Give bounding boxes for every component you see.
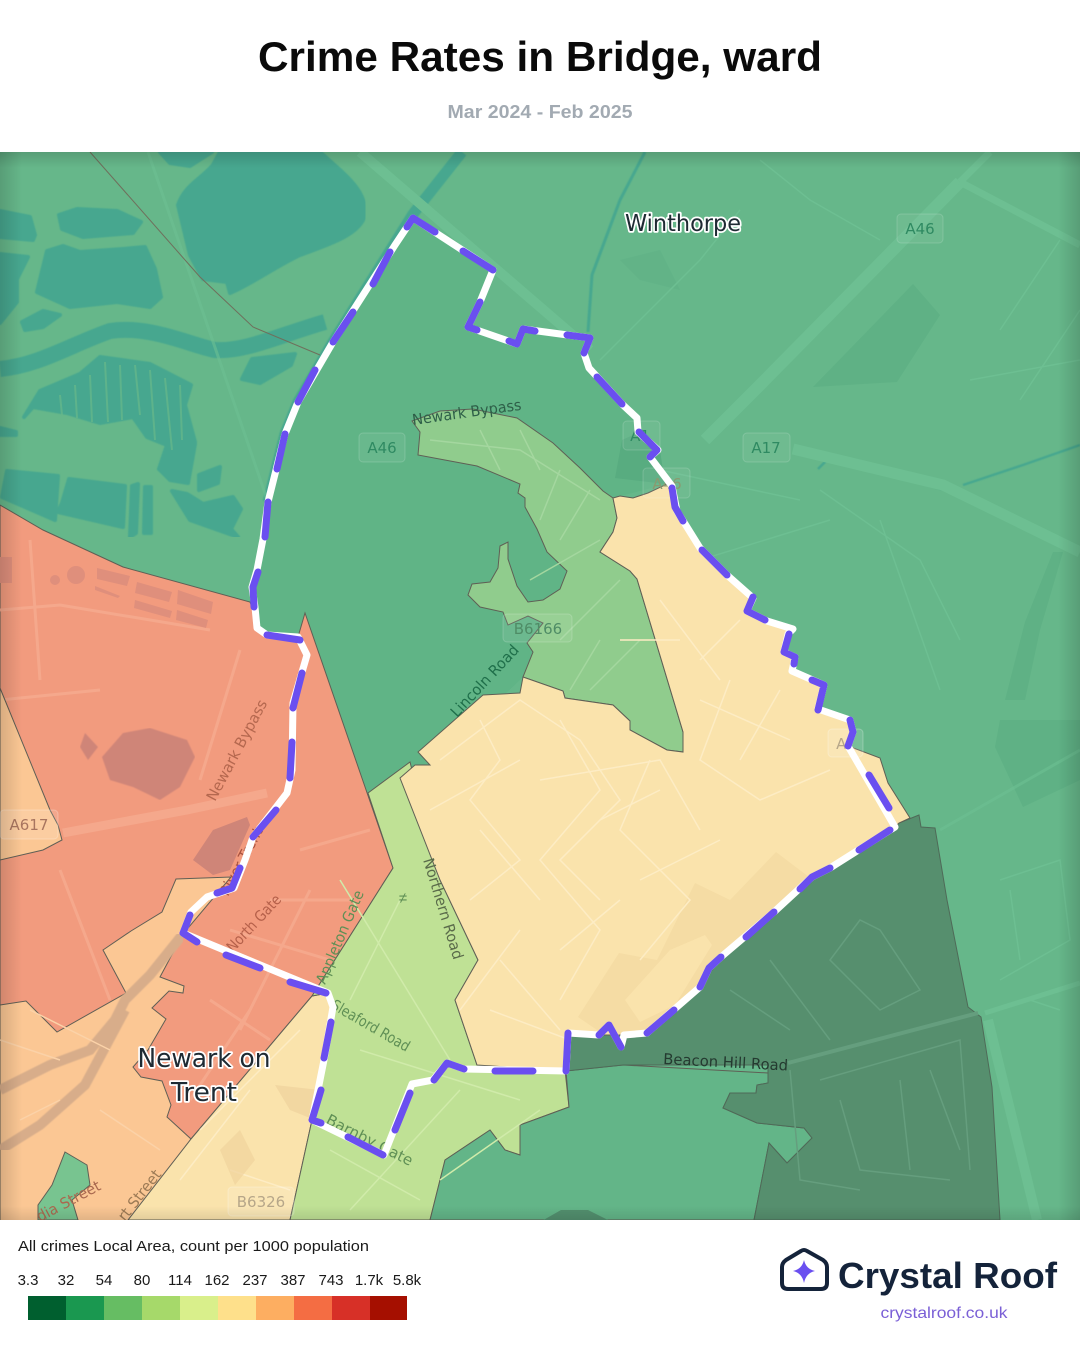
street network: [430, 600, 830, 1040]
road shield: B6166: [503, 614, 572, 642]
road shield: A46 north-east: [897, 214, 943, 243]
legend values: 54: [96, 1272, 112, 1289]
legend values: 1.7k: [355, 1272, 384, 1289]
legend values: 387: [280, 1272, 306, 1289]
ward region: green north: [270, 231, 585, 700]
region: cream central: [400, 484, 910, 1071]
place label: Winthorpe: Winthorpe: [625, 211, 741, 237]
streets in dark green: [730, 920, 978, 1190]
road label: Lincoln Road: Lincoln Road: [447, 641, 523, 721]
road shield: A617: [0, 810, 58, 839]
legend values: [18, 1272, 422, 1289]
road shield: A46 west: [359, 433, 405, 462]
region: peach west edge: [0, 688, 62, 860]
title: Crime Rates in Bridge, ward: [258, 33, 822, 80]
region: cream south-west: [128, 993, 333, 1220]
road label: Sleaford Road: Sleaford Road: [328, 996, 413, 1055]
road shield: A46 west: A46: [367, 439, 397, 457]
road labels: [33, 396, 789, 1226]
region: dark green south-east: [566, 815, 1000, 1220]
road shields: partly hidden A labels: A46: [652, 475, 682, 493]
water features: [0, 152, 365, 537]
subtitle: date range: Mar 2024 - Feb 2025: [448, 102, 632, 122]
salmon lake: [80, 728, 195, 800]
dark strip at base: [544, 1210, 608, 1220]
roundabout pond: [644, 453, 662, 482]
road shield: A17: [743, 433, 790, 462]
ward boundary: white base line: [183, 218, 895, 1155]
region: park patch: [38, 1152, 90, 1220]
region: high crime salmon: [0, 505, 393, 1139]
legend values: 162: [204, 1272, 230, 1289]
cream shaded land: [578, 852, 809, 1035]
road shield: A46 north-east: A46: [905, 220, 935, 238]
legend values: 32: [58, 1272, 74, 1289]
logo: [782, 1250, 1058, 1322]
road label: Sydney Street: dia Street: [33, 1177, 104, 1226]
region: lime south: [290, 762, 569, 1220]
road label: Barnby Gate: Barnby Gate: [323, 1111, 416, 1170]
region: peach town centre: [0, 877, 231, 1232]
legend: [18, 1238, 422, 1320]
logo wordmark: Crystal Roof: [838, 1255, 1058, 1296]
road label: Appleton Gate: Appleton Gate: [312, 887, 368, 987]
legend values: 80: [134, 1272, 150, 1289]
school patches: [220, 1085, 320, 1185]
road label: Newark Bypass west: Newark Bypass: [203, 696, 271, 804]
salmon works tanks: [0, 557, 213, 628]
legend values: 237: [242, 1272, 268, 1289]
road shield: A17: A17: [751, 439, 781, 457]
road label: Beacon Hill Road: Beacon Hill Road: [663, 1050, 789, 1075]
legend title: All crimes Local Area, count per 1000 population: [18, 1238, 369, 1255]
road label: Albert Street: rt Street: [114, 1166, 165, 1224]
streets in light green: [430, 430, 640, 690]
region: mid green south: [430, 1065, 812, 1220]
road shield: B6166: B6166: [514, 620, 562, 638]
road label: North Gate: North Gate: [223, 891, 285, 956]
reed bed stripes: [60, 362, 182, 450]
road shields: partly hidden A labels: A1: [630, 427, 650, 445]
road shield: A617: A617: [10, 816, 48, 834]
river through town: [0, 934, 183, 1150]
railway station symbol: ≠: [399, 890, 407, 907]
legend values: 114: [168, 1272, 192, 1289]
river and waterway lines: [0, 152, 1080, 502]
streets in lime and cream west: [330, 880, 540, 1210]
salmon car park: [193, 817, 250, 875]
place label: Newark on Trent: Newark on: [138, 1044, 270, 1074]
ward boundary: purple dashes: [183, 218, 890, 1155]
road label: Newark Bypass north: Newark Bypass: [411, 396, 523, 429]
legend values: 3.3: [18, 1272, 38, 1289]
place label: Trent: Trent: [170, 1078, 237, 1108]
legend values: 5.8k: [393, 1272, 422, 1289]
darker fields: [620, 250, 1080, 807]
road label: River Trent: River Trent: [216, 824, 267, 899]
map panel: [0, 152, 1080, 1232]
legend colour scale: [28, 1296, 407, 1320]
salmon road bands: [0, 540, 370, 1100]
road label: Northern Road: Northern Road: [419, 856, 467, 962]
road shields: partly hidden A labels: [623, 421, 863, 757]
icon: house with star: [782, 1250, 827, 1289]
power line: [90, 152, 320, 355]
road shield: B6326: [228, 1187, 294, 1216]
map edge vignette: [0, 152, 1080, 1220]
legend values: 743: [318, 1272, 344, 1289]
road shields: partly hidden A labels: A1: [836, 735, 856, 753]
logo url: crystalroof.co.uk: [880, 1305, 1009, 1322]
background roads, lighter lines: [211, 196, 1073, 788]
road shield: B6326: B6326: [237, 1193, 285, 1211]
region: light green north: [412, 409, 683, 752]
map base area: [0, 152, 1080, 1220]
